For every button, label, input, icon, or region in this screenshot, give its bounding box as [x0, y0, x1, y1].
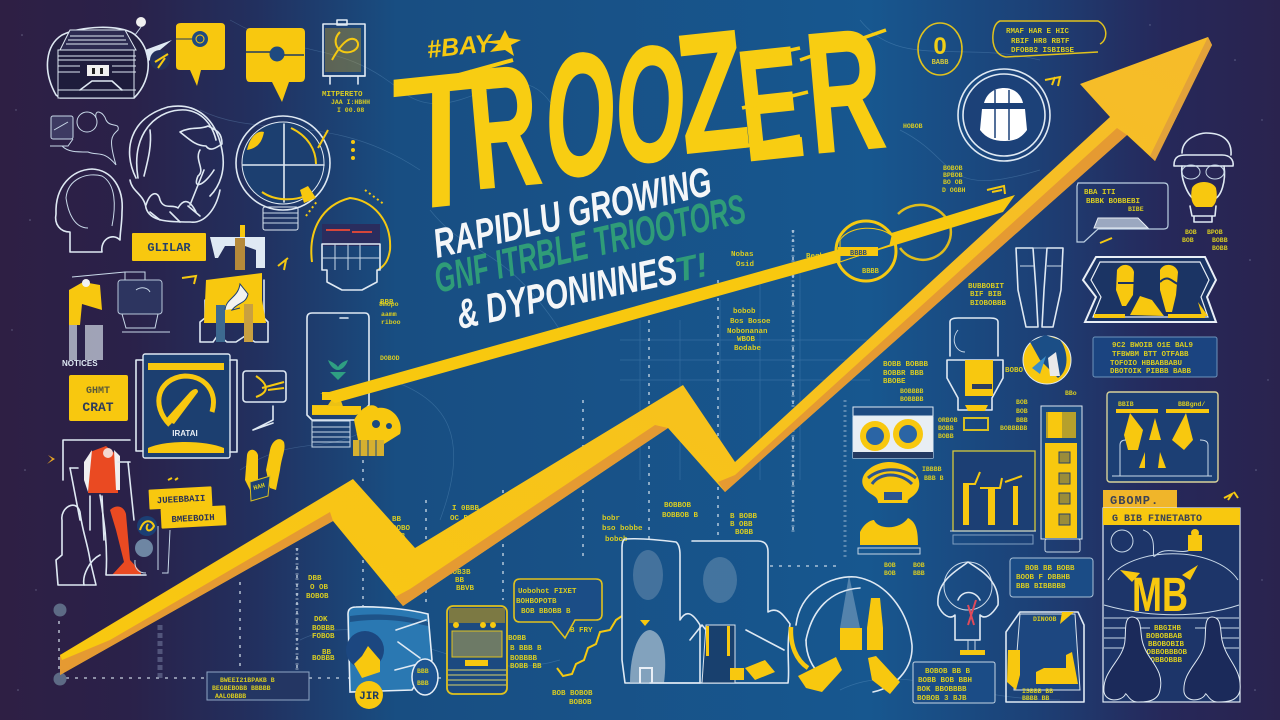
subtitle: accent T!: T!	[672, 246, 711, 290]
icon: round 0 badge	[918, 23, 962, 75]
micro text: centre columns: WBOB	[737, 336, 756, 344]
micro text: centre columns: OC BOB	[450, 515, 478, 523]
label: GLILAR: GLILAR	[147, 241, 191, 255]
icon: mic robot: BOBBBBB	[1000, 425, 1027, 432]
micro text: centre columns: BOBBOB B	[662, 512, 699, 520]
callout: top right rounded text: RBIF HR8 RBTF	[1011, 38, 1070, 46]
micro text: centre columns: BOB BOBOB	[552, 690, 593, 698]
icon: train front	[447, 606, 507, 694]
text box: bottom: BOBB BOB BBH	[918, 677, 972, 685]
icon: yellow speech bubble one	[176, 23, 225, 86]
icon: small head outline	[56, 169, 122, 252]
micro text: upper right column: BIOBOBBB	[970, 300, 1007, 308]
micro text: centre columns: BOBBB	[312, 625, 335, 633]
micro text: centre columns: Nobas	[731, 251, 754, 259]
panel: big MB board: GBOMP.	[1110, 494, 1159, 508]
label: yellow tag pair: BMEEBOIH	[171, 513, 215, 525]
micro text: centre columns: BOBO	[1005, 367, 1024, 375]
icon: mask figure: BOB	[1182, 237, 1194, 244]
panel: tall yellow column	[1041, 390, 1082, 552]
title: TROOZER: T	[391, 30, 491, 250]
icon: device with arch	[306, 190, 390, 290]
caption: top left micro text: MITPERETO	[322, 91, 363, 99]
icon: tablet with text: BBBK BOBBEBI	[1086, 198, 1140, 206]
micro text: centre columns: DOBOD	[380, 355, 400, 362]
micro text: centre columns: Osid	[736, 261, 754, 269]
micro text: upper right column	[903, 123, 1007, 308]
panel: hands display: BBIB	[1118, 401, 1134, 408]
label: GHMT CRAT: GHMT	[86, 386, 110, 397]
micro text: centre columns: BOBBOB	[664, 502, 692, 510]
micro text: centre columns: BBB	[380, 299, 394, 307]
micro text: centre columns: bobob	[733, 308, 756, 316]
micro text: centre columns: BOBB	[508, 635, 527, 643]
title: TROOZER: O	[541, 16, 621, 215]
text box: right panel: DBOTOIK PIBBB BABB	[1110, 368, 1192, 376]
micro text: centre columns: BOBB	[735, 529, 754, 537]
subtitle: DYONINNEST: & DYPONINNES	[452, 246, 681, 338]
micro text: centre columns: bobob	[605, 536, 628, 544]
icon: blue box with duck: BBB	[417, 680, 429, 687]
panel: tall yellow column: BBo	[1065, 390, 1077, 397]
icon: pants	[1016, 248, 1063, 327]
icon: yellow brain bust	[858, 462, 920, 554]
icon: robot bust	[938, 562, 998, 655]
micro text: centre columns: DOK	[314, 616, 328, 624]
icon: figures with orange and red clothes	[47, 440, 146, 585]
icon: mic robot: BOB	[1016, 399, 1028, 406]
panel: gauge	[136, 354, 237, 458]
micro text: upper right column: BIF BIB	[970, 291, 1002, 299]
caption: top left micro text: JAA I:HBHH	[331, 99, 370, 106]
arrow shadow: first rise	[60, 512, 333, 675]
micro text: centre columns: B FRY	[570, 627, 593, 635]
icon: tablet with text	[1077, 183, 1168, 243]
tagline: hay star: #BAY	[426, 29, 495, 64]
micro text: centre columns: BOBOB	[306, 593, 329, 601]
icon: tablet with text: BIBE	[1128, 206, 1144, 213]
icon: yellow figures: HAH	[253, 482, 266, 492]
icon: mic robot	[883, 318, 1028, 577]
icon: phone with plant	[307, 313, 369, 447]
label: GHMT CRAT	[62, 359, 128, 421]
callout: top right rounded text: DFOBB2 ISBIBSE	[1011, 47, 1075, 55]
main growth arrow	[60, 37, 1212, 675]
text box: small: BOOB F DBBHB	[1016, 574, 1071, 582]
panel: big MB board: BBGIHB	[1154, 625, 1182, 633]
micro text: upper right column: BUBBOBIT	[968, 283, 1005, 291]
icon: mask figure: BOBB	[1212, 245, 1228, 252]
micro text near device	[379, 301, 401, 326]
micro text near device: aamm	[381, 311, 397, 318]
icon: monitor and hand	[50, 112, 118, 165]
panel: gauge: IRATAI	[172, 429, 198, 438]
micro text: centre columns: BOBBB	[312, 655, 335, 663]
micro text: centre columns: B BBB B	[510, 645, 542, 653]
micro text: centre columns: DOBO	[392, 525, 411, 533]
dashed chart guides	[54, 230, 845, 686]
text box: bottom: BOBOB 3 BJB	[917, 695, 967, 703]
micro text: upper right column: BOBOB	[943, 165, 963, 172]
text box: bottom: BOK BBOBBBB	[917, 686, 967, 694]
icon: mic robot: BOBBBB	[900, 388, 924, 395]
micro text: centre columns: FOBOB	[312, 633, 335, 641]
icon: helmet circle badge	[958, 69, 1060, 161]
icon: blue box with duck: BBB	[417, 668, 429, 675]
micro text: centre columns: BB	[396, 533, 406, 541]
text box: right panel	[1093, 337, 1217, 377]
icon: mic robot: BOBBR BBB	[883, 370, 924, 378]
icon: large head with skull	[130, 106, 223, 222]
thin secondary arrow line: BBBB	[850, 250, 868, 258]
blueprint background lines	[200, 20, 1060, 700]
icon: shirt on hanger	[69, 272, 125, 360]
icon: jar panel with machine: DINOOB	[1033, 616, 1057, 623]
icon: small emblem and globe	[135, 516, 170, 573]
label: GLILAR	[132, 233, 206, 261]
icon: small branch box	[243, 371, 286, 430]
icon: mic robot: BOB	[884, 562, 896, 569]
subtitle: GNF ITRBLE TRIOOTORS: GNF ITRBLE TRIOOTORS	[430, 185, 750, 302]
icon: round window lamp	[236, 116, 330, 230]
micro text: centre columns: BB	[455, 577, 465, 585]
icon: jar panel with machine	[1006, 612, 1084, 702]
panel: big MB board: BBOBOBIB	[1148, 641, 1185, 649]
arrow shadow: second rise	[395, 425, 668, 606]
micro text: centre columns: BBVB	[456, 585, 475, 593]
text box: small	[1010, 558, 1093, 597]
micro text: centre columns: Bos Bosoe	[730, 318, 771, 326]
icon: jar panel with machine: ISBBB BB	[1022, 688, 1053, 695]
micro text: upper right column: BO OB	[943, 179, 963, 186]
thin secondary arrow line: BBBB	[862, 268, 880, 276]
icon: mic robot: BOBB	[938, 425, 954, 432]
panel: big MB board: BOBBOBBBOB	[1142, 649, 1188, 657]
micro text: centre columns: I 0BBB	[452, 505, 480, 513]
label: yellow tag pair	[149, 478, 226, 529]
callout: speech bubble: BOB BBOBB B	[521, 608, 571, 616]
icon: mic robot: BOBB	[938, 433, 954, 440]
title: TROOZER: E	[730, 14, 810, 195]
title: TROOZER: O	[611, 10, 691, 198]
icon: round 0 badge: 0	[933, 33, 947, 60]
icon: jar panel with machine: BBBB BB	[1022, 695, 1049, 702]
title: TROOZER	[391, 0, 891, 250]
icon: bird coin	[1023, 335, 1071, 384]
micro text near device: riboo	[381, 319, 401, 326]
icon: tablet with text: BBA ITI	[1084, 189, 1116, 197]
panel: hexagon duo	[1083, 257, 1216, 322]
icon: framed emblem	[323, 20, 365, 84]
callout: speech bubble: BOHBOPOTB	[516, 598, 557, 606]
title: TROOZER: R	[461, 29, 547, 226]
icon: blue box with duck: JIR	[359, 691, 379, 703]
micro text: upper right column: HOBOB	[903, 123, 923, 130]
panel: big MB board: MB	[1132, 569, 1188, 622]
icon: yellow speech bubble two	[246, 28, 305, 102]
micro text: upper right column: BPBOB	[943, 172, 963, 179]
panel: hands display	[1107, 392, 1218, 482]
panel: big MB board: BOBBOBBB	[1146, 657, 1183, 665]
icon: mic robot: BOBB BOBBB	[883, 361, 929, 369]
icon: mic robot: BOB	[1016, 408, 1028, 415]
yellow dots	[351, 140, 355, 160]
text box: bottom: BOBOB BB B	[925, 668, 971, 676]
micro text: centre columns: bso bobbe	[602, 525, 643, 533]
icon: mic robot: BOB	[913, 562, 925, 569]
callout: bottom axis text box: BEGBEBOBB BBBBB	[212, 685, 271, 692]
icon: mask figure	[1174, 133, 1233, 252]
callout: bottom axis text box: AALOBBBB	[215, 693, 246, 700]
micro text: centre columns	[306, 251, 1024, 707]
icon: car	[47, 17, 172, 98]
icon: helmet circle	[791, 575, 912, 694]
icon: mask figure: BPOB	[1207, 229, 1223, 236]
icon: mic robot: ORBOB	[938, 417, 958, 424]
panel: big MB board	[1103, 490, 1240, 702]
subtitle: RAPIDLU GROWING: RAPIDLU GROWING	[429, 158, 716, 267]
icon: mic robot: BBB	[913, 570, 925, 577]
micro text: centre columns: B BOBB	[730, 513, 758, 521]
arrow shadow: head edge	[1150, 37, 1212, 161]
micro text: centre columns: BB	[322, 649, 332, 657]
text box: right panel: TOFOIO HBBABBABU	[1110, 360, 1183, 368]
micro text near device: 8mopo	[379, 301, 399, 308]
icon: round 0 badge: BABB	[932, 59, 949, 67]
panel: twin swirl film	[853, 407, 933, 458]
micro text: centre columns: bobr	[602, 515, 620, 523]
icon: portraits	[622, 539, 790, 683]
micro text: centre columns: BOBBBB	[510, 655, 538, 663]
panel: big MB board: G BIB FINETABTO	[1112, 514, 1202, 525]
callout: speech bubble	[514, 579, 622, 676]
icon: mic robot: BBB	[1016, 417, 1028, 424]
micro text: upper right column: D OGBH	[942, 187, 966, 194]
icon: yellow crest	[353, 405, 401, 456]
icon: yellow pouch	[182, 225, 288, 342]
micro text: centre columns: BOBOB	[569, 699, 592, 707]
micro text: centre columns: B OBB	[730, 521, 753, 529]
panel: bar chart	[950, 451, 1036, 544]
text box: bottom	[913, 662, 995, 703]
arrow shadow: third rise	[718, 128, 1127, 492]
icon: mic robot: BOBBBB	[900, 396, 924, 403]
icon: mic robot: BBB B	[924, 475, 944, 482]
label: yellow tag pair: JUEEBBAII	[157, 494, 206, 506]
micro text: centre columns: BOB3B	[448, 569, 471, 577]
micro text: centre columns: Nobonanan	[727, 328, 768, 336]
micro text: centre columns: Begba	[806, 253, 829, 261]
icon: mask figure: BOB	[1185, 229, 1197, 236]
callout: top right rounded text	[993, 21, 1106, 57]
label: GHMT CRAT: NOTICES	[62, 359, 98, 368]
micro text: centre columns: BOBB BB	[510, 663, 542, 671]
icon: camera	[118, 272, 170, 332]
micro text: centre columns: DBB	[308, 575, 322, 583]
text box: small: BBB BIBBBBB	[1016, 583, 1066, 591]
caption: top left micro text	[322, 91, 370, 114]
icon: blue box with duck	[346, 607, 438, 709]
caption: top left micro text: I 00.08	[337, 107, 364, 114]
panel: hands display: BBBgnd/	[1178, 401, 1205, 408]
thin secondary arrow line	[312, 195, 1015, 415]
text box: small: BOB BB BOBB	[1025, 565, 1075, 573]
icon: mic robot: IBBBB	[922, 466, 942, 473]
micro text: centre columns: Bodabe	[734, 345, 762, 353]
micro text: centre columns: O OB	[310, 584, 329, 592]
callout: speech bubble: Uobohot FIXET	[518, 588, 577, 596]
callout: bottom axis text box	[207, 672, 309, 700]
callout: bottom axis text box: BWEEI21BPAKB B	[220, 677, 275, 684]
icon: mic robot: BOB	[884, 570, 896, 577]
micro text: centre columns: BB	[392, 516, 402, 524]
icon: yellow figures	[245, 439, 285, 501]
panel: big MB board: BOBOBBAB	[1146, 633, 1183, 641]
callout: top right rounded text: RMAF HAR E HIC	[1006, 28, 1070, 36]
text box: right panel: TFBWBM BTT OTFABB	[1112, 351, 1189, 359]
icon: mic robot: BBOBE	[883, 378, 906, 386]
text box: right panel: 9C2 BWOIB O1E BAL9	[1112, 342, 1194, 350]
icon: mask figure: BOBB	[1212, 237, 1228, 244]
label: GHMT CRAT: CRAT	[82, 400, 114, 415]
